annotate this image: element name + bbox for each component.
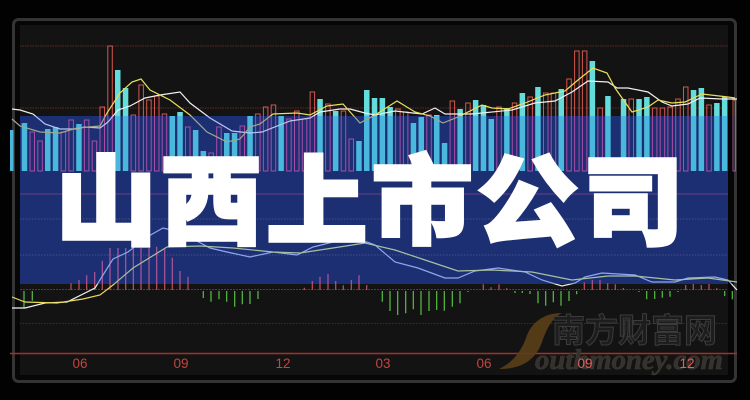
time axis labels: 03	[375, 356, 391, 371]
time axis labels: 09	[577, 356, 593, 371]
watermark: southmoney logo	[499, 312, 723, 376]
title: 山西上市公司	[56, 148, 688, 257]
horizontal grid lines	[10, 46, 737, 354]
watermark Chinese name: 南方财富网	[552, 312, 717, 349]
time axis labels: 12	[679, 356, 695, 371]
MACD histogram	[24, 247, 732, 315]
time axis labels: 12	[275, 356, 291, 371]
time axis labels: 06	[476, 356, 492, 371]
volume bar chart	[10, 46, 736, 171]
icon: swoosh	[499, 313, 562, 369]
blue title band	[20, 116, 728, 284]
lower indicator lines	[12, 228, 737, 308]
time axis labels: 09	[173, 356, 189, 371]
time axis labels: 06	[72, 356, 88, 371]
upper moving average lines	[12, 68, 737, 142]
watermark web address: outhmoney.com	[535, 344, 723, 376]
time axis labels	[72, 356, 695, 371]
